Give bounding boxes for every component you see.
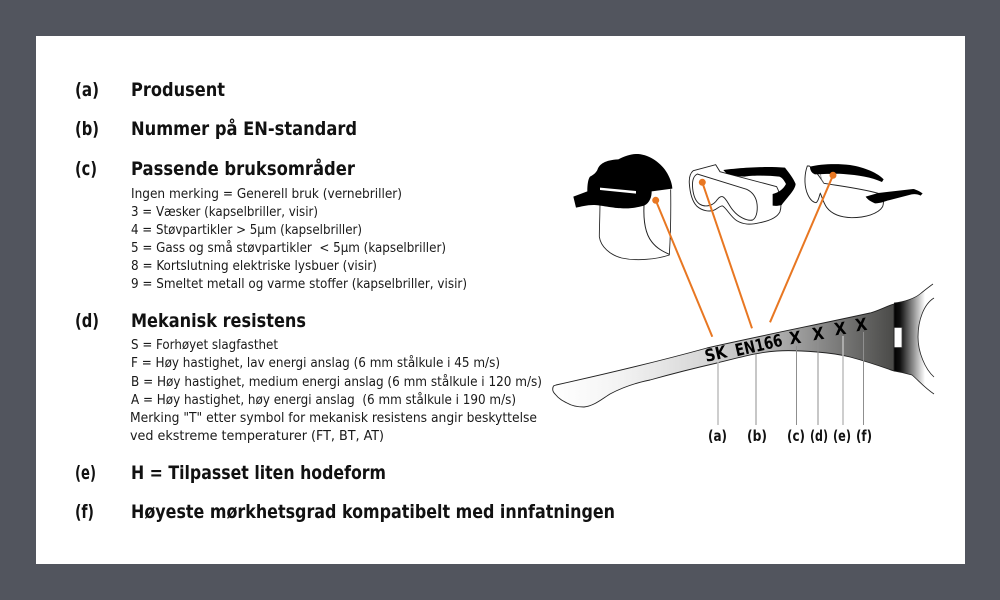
marking: X (d): X bbox=[811, 324, 826, 345]
item (d): mechanical resistance: Mekanisk resistens bbox=[131, 310, 306, 332]
pointer lines to markings bbox=[718, 332, 864, 425]
item (d): mechanical resistance: S = Forhøyet slagfasthet bbox=[131, 338, 278, 353]
item (d): mechanical resistance: Merking "T" etter symbol for mekanisk resistens angir beskyttelse bbox=[130, 411, 537, 426]
item (d): mechanical resistance: ved ekstreme temperaturer (FT, BT, AT) bbox=[130, 429, 384, 444]
arrow: glasses to marking bbox=[770, 172, 836, 322]
arrow: shield to marking bbox=[652, 197, 712, 337]
hinge and frame end bbox=[894, 284, 934, 394]
icon: safety glasses bbox=[805, 164, 923, 218]
legend list bbox=[75, 79, 615, 523]
item (f): darkness level: (f) bbox=[75, 501, 94, 523]
item (c): areas of use: 8 = Kortslutning elektriske lysbuer (visir) bbox=[131, 259, 377, 274]
item (a): manufacturer bbox=[75, 79, 225, 101]
diagram: temple arm with markings bbox=[553, 284, 934, 407]
marking labels: (f) bbox=[856, 427, 872, 445]
item (c): areas of use bbox=[75, 156, 467, 292]
item (e): head form: H = Tilpasset liten hodeform bbox=[131, 462, 386, 484]
marking: SK: SK bbox=[703, 342, 730, 367]
item (d): mechanical resistance: F = Høy hastighet, lav energi anslag (6 mm stålkule i 45 m/s) bbox=[131, 354, 500, 371]
icon: safety goggles bbox=[689, 165, 796, 224]
arrow: goggles to marking bbox=[699, 179, 752, 328]
temple arm bbox=[553, 304, 894, 407]
item (d): mechanical resistance: B = Høy hastighet, medium energi anslag (6 mm stålkule i 120 m/s) bbox=[131, 373, 542, 390]
marking labels: (a) bbox=[708, 427, 727, 445]
marking: X (e): X bbox=[833, 319, 848, 340]
item (b): EN standard number: Nummer på EN-standard bbox=[131, 116, 357, 140]
marking labels bbox=[708, 427, 872, 445]
marking labels: (c) bbox=[787, 427, 805, 445]
icon: face shield bbox=[573, 154, 672, 260]
item (f): darkness level: Høyeste mørkhetsgrad kompatibelt med innfatningen bbox=[131, 501, 615, 523]
item (c): areas of use: (c) bbox=[75, 158, 97, 180]
item (c): areas of use: Ingen merking = Generell bruk (vernebriller) bbox=[131, 187, 402, 202]
item (d): mechanical resistance: (d) bbox=[75, 310, 99, 332]
item (c): areas of use: 3 = Væsker (kapselbriller, visir) bbox=[131, 205, 318, 220]
marking: X (f): X bbox=[854, 315, 869, 336]
item (e): head form: (e) bbox=[75, 462, 96, 484]
marking labels: (d) bbox=[810, 427, 828, 445]
item (a): manufacturer: Produsent bbox=[131, 79, 225, 101]
marking labels: (b) bbox=[747, 427, 767, 445]
marking labels: (e) bbox=[833, 427, 851, 445]
marking: EN166: EN166 bbox=[733, 331, 785, 361]
item (c): areas of use: 9 = Smeltet metall og varme stoffer (kapselbriller, visir) bbox=[131, 277, 467, 292]
item (c): areas of use: 5 = Gass og små støvpartikler < 5µm (kapselbriller) bbox=[131, 239, 446, 256]
marking: X (c): X bbox=[788, 328, 803, 349]
item (b): EN standard number: (b) bbox=[75, 118, 99, 140]
item (c): areas of use: 4 = Støvpartikler > 5µm (kapselbriller) bbox=[131, 223, 362, 238]
item (d): mechanical resistance: A = Høy hastighet, høy energi anslag (6 mm stålkule i 190 m/s) bbox=[131, 391, 516, 408]
item (d): mechanical resistance bbox=[75, 310, 542, 444]
item (a): manufacturer: (a) bbox=[75, 79, 99, 101]
item (c): areas of use: Passende bruksområder bbox=[131, 156, 356, 180]
